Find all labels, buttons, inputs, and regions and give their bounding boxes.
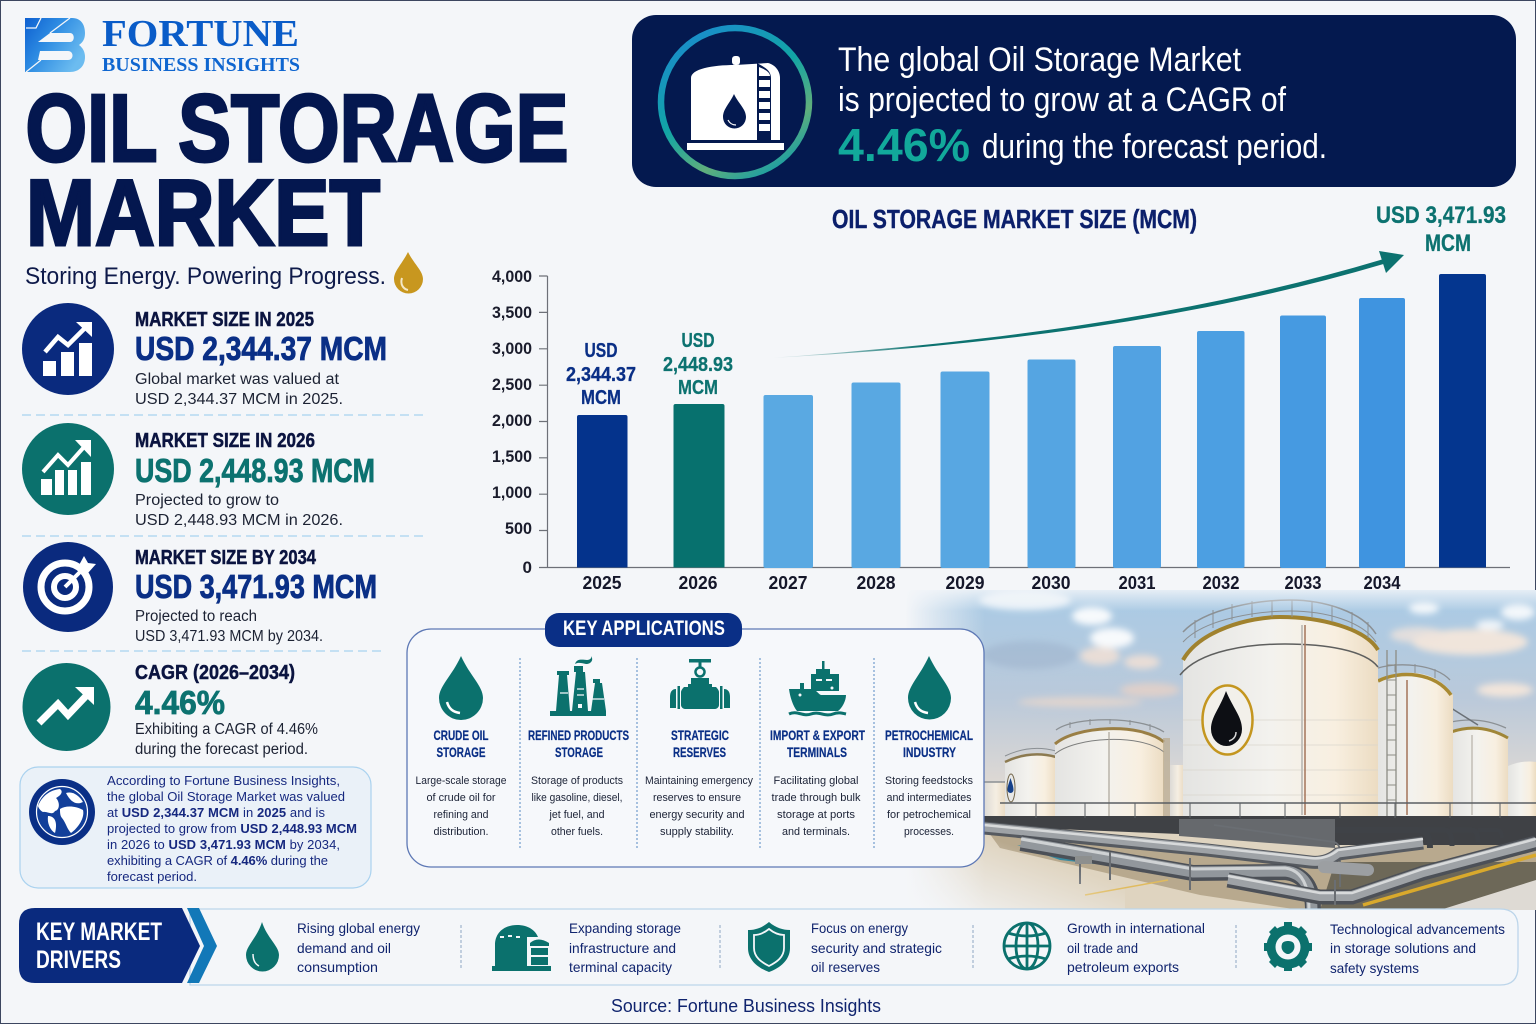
chart title: OIL STORAGE MARKET SIZE (MCM) xyxy=(832,204,1197,234)
driver: energy demand xyxy=(246,920,420,975)
small background tanks xyxy=(984,748,1536,818)
icon: drop xyxy=(439,656,483,720)
icon: FB monogram xyxy=(25,18,85,72)
driver heading: DRIVERS xyxy=(36,946,121,974)
application: crude oil storage: STORAGE xyxy=(436,745,486,760)
application: strategic reserves: RESERVES xyxy=(673,745,726,760)
panel: summary note: forecast period. xyxy=(107,869,197,884)
callout: 2034 value xyxy=(1376,202,1506,257)
heading pill: KEY APPLICATIONS xyxy=(563,617,725,640)
driver: technology: Technological advancements xyxy=(1330,921,1505,937)
y axis: 500 xyxy=(505,519,532,538)
driver heading: KEY MARKET xyxy=(36,918,162,946)
application: crude oil storage: CRUDE OIL xyxy=(434,728,488,743)
application: import and export terminals: storage at ports xyxy=(777,809,856,821)
application: import and export terminals: and terminals. xyxy=(782,826,850,838)
bar label 2025: 2,344.37 xyxy=(566,364,636,386)
icon: globe xyxy=(29,779,95,845)
icon: refinery xyxy=(550,656,606,716)
icon: drop xyxy=(908,656,951,719)
stat card: CAGR: 4.46% xyxy=(135,684,225,721)
panel: summary note: According to Fortune Business Insights, xyxy=(107,773,340,788)
application: petrochemical industry: processes. xyxy=(904,826,954,838)
icon: valve xyxy=(670,659,730,709)
stat card: CAGR: Exhibiting a CAGR of 4.46% xyxy=(135,721,318,738)
application: strategic reserves: energy security and xyxy=(650,809,744,821)
stat card: market size 2034: MARKET SIZE BY 2034 xyxy=(135,547,317,569)
driver: technology: safety systems xyxy=(1330,960,1419,976)
year labels: 2027 xyxy=(768,573,808,593)
application: petrochemical industry: PETROCHEMICAL xyxy=(885,728,973,743)
icon: gold oil drop xyxy=(394,252,423,294)
tagline xyxy=(25,252,423,294)
driver: international trade: oil trade and xyxy=(1067,940,1138,956)
bar chart xyxy=(492,251,1510,593)
icon: growth chart teal xyxy=(22,423,114,515)
application: import and export terminals: TERMINALS xyxy=(787,745,847,760)
bar label 2025: MCM xyxy=(581,387,621,409)
driver: technology: in storage solutions and xyxy=(1330,940,1476,956)
driver heading xyxy=(19,908,217,983)
bars xyxy=(577,274,1486,568)
stat card: CAGR xyxy=(22,662,318,758)
left tank xyxy=(1055,719,1170,818)
application: import and export terminals xyxy=(770,661,866,838)
panel: key applications xyxy=(407,613,984,867)
logo: Fortune Business Insights xyxy=(25,13,300,76)
y axis: 3,000 xyxy=(492,339,532,358)
application: crude oil storage: distribution. xyxy=(434,826,488,838)
driver: international trade: Growth in international xyxy=(1067,920,1205,936)
banner: CAGR headline: is projected to grow at a CAGR of xyxy=(838,81,1286,119)
driver: storage infrastructure: Expanding storage xyxy=(569,920,681,936)
application: import and export terminals: IMPORT & EXPORT xyxy=(770,728,866,743)
stat card: CAGR: during the forecast period. xyxy=(135,741,308,758)
application: refined products storage: jet fuel, and xyxy=(549,809,604,821)
driver: technology xyxy=(1264,921,1505,976)
arrow: growth trend xyxy=(770,251,1404,358)
bar label 2025: USD xyxy=(584,340,618,362)
bar label 2025 xyxy=(566,340,636,409)
year labels: 2034 xyxy=(1364,573,1400,593)
driver: energy security: oil reserves xyxy=(811,959,880,975)
title xyxy=(26,75,568,265)
stat card: market size 2034: USD 3,471.93 MCM xyxy=(135,568,377,605)
driver: storage infrastructure xyxy=(492,920,681,975)
stat card: market size 2025 xyxy=(22,303,387,408)
driver: energy demand: Rising global energy xyxy=(297,920,420,936)
application: strategic reserves: reserves to ensure xyxy=(653,792,741,804)
year labels: 2026 xyxy=(678,573,718,593)
driver: international trade: petroleum exports xyxy=(1067,959,1179,975)
year labels: 2033 xyxy=(1284,573,1322,593)
icon: storage tank in ring xyxy=(661,28,809,176)
year labels: 2025 xyxy=(582,573,622,593)
banner: CAGR headline: 4.46% xyxy=(838,119,970,171)
stat card: CAGR: CAGR (2026–2034) xyxy=(135,662,295,684)
application: strategic reserves: supply stability. xyxy=(660,826,734,838)
main tank xyxy=(1180,600,1378,818)
stat card: market size 2025: MARKET SIZE IN 2025 xyxy=(135,309,314,331)
driver: energy security: Focus on energy xyxy=(811,920,908,936)
callout: 2034 value: USD 3,471.93 xyxy=(1376,202,1506,229)
application: refined products storage: like gasoline, diesel, xyxy=(532,792,622,804)
bar label 2026 xyxy=(663,330,733,399)
stat card: market size 2025: USD 2,344.37 MCM xyxy=(135,330,387,367)
pipes xyxy=(984,825,1536,910)
bar label 2026: 2,448.93 xyxy=(663,354,733,376)
application: strategic reserves: Maintaining emergency xyxy=(645,775,753,787)
application: crude oil storage xyxy=(416,656,506,838)
driver: energy demand: consumption xyxy=(297,959,378,975)
icon: growth chart navy xyxy=(22,303,114,395)
y axis: 0 xyxy=(523,558,532,577)
right tanks xyxy=(1377,650,1508,820)
icon: target with arrow xyxy=(23,542,113,632)
callout: 2034 value: MCM xyxy=(1425,230,1471,257)
stat card: market size 2026: Projected to grow to xyxy=(135,492,279,509)
bar label 2026: USD xyxy=(682,330,714,352)
y axis: 1,500 xyxy=(492,447,532,466)
y axis: 1,000 xyxy=(492,483,532,502)
bar label 2026: MCM xyxy=(678,377,718,399)
panel: summary note: in 2026 to USD 3,471.93 MCM by 2034, xyxy=(107,837,340,852)
panel: summary note xyxy=(20,767,371,888)
stat card: market size 2034: USD 3,471.93 MCM by 2034. xyxy=(135,628,323,645)
application: crude oil storage: Large-scale storage xyxy=(416,775,506,787)
clouds xyxy=(979,590,1535,707)
year labels: 2028 xyxy=(856,573,896,593)
title: OIL STORAGE xyxy=(26,75,568,182)
application: strategic reserves xyxy=(645,659,753,838)
stat card: market size 2026: USD 2,448.93 MCM in 2026. xyxy=(135,512,343,529)
stat card: market size 2026: MARKET SIZE IN 2026 xyxy=(135,430,315,452)
y axis: 4,000 xyxy=(492,267,532,286)
application: import and export terminals: trade through bulk xyxy=(772,792,861,804)
application: petrochemical industry: INDUSTRY xyxy=(903,745,956,760)
y axis: 2,500 xyxy=(492,375,532,394)
stat card: market size 2034: Projected to reach xyxy=(135,608,257,625)
y axis: 3,500 xyxy=(492,303,532,322)
heading pill xyxy=(545,613,742,647)
source: Source: Fortune Business Insights xyxy=(611,996,881,1016)
logo: Fortune Business Insights: FORTUNE xyxy=(102,13,299,55)
year labels: 2032 xyxy=(1202,573,1240,593)
application: crude oil storage: of crude oil for xyxy=(426,792,496,804)
driver: storage infrastructure: terminal capacity xyxy=(569,959,672,975)
application: petrochemical industry xyxy=(885,656,973,838)
driver: storage infrastructure: infrastructure and xyxy=(569,940,676,956)
application: strategic reserves: STRATEGIC xyxy=(671,728,729,743)
stat card: market size 2034 xyxy=(23,542,377,645)
panel: key market drivers xyxy=(19,908,1518,985)
panel: summary note: at USD 2,344.37 MCM in 2025 and is xyxy=(107,805,326,820)
application: refined products storage: other fuels. xyxy=(551,826,603,838)
stat card: market size 2026 xyxy=(22,423,375,529)
stat card: market size 2026: USD 2,448.93 MCM xyxy=(135,452,375,489)
tagline: Storing Energy. Powering Progress. xyxy=(25,263,386,290)
y axis: 2,000 xyxy=(492,411,532,430)
panel: summary note: exhibiting a CAGR of 4.46% during the xyxy=(107,853,328,868)
photo: oil storage tanks xyxy=(905,585,1536,910)
year labels: 2029 xyxy=(946,573,984,593)
banner: CAGR headline: during the forecast period. xyxy=(982,128,1327,166)
application: refined products storage xyxy=(528,656,629,838)
driver: international trade xyxy=(1004,920,1205,975)
application: petrochemical industry: and intermediates xyxy=(886,792,972,804)
driver: energy security xyxy=(748,920,942,975)
application: petrochemical industry: Storing feedstocks xyxy=(885,775,973,787)
stat card: market size 2025: USD 2,344.37 MCM in 2025. xyxy=(135,391,343,408)
banner: CAGR headline xyxy=(632,15,1516,187)
banner: CAGR headline: The global Oil Storage Market xyxy=(838,41,1241,79)
application: refined products storage: Storage of products xyxy=(531,775,623,787)
year labels: 2031 xyxy=(1118,573,1156,593)
application: crude oil storage: refining and xyxy=(434,809,488,821)
year labels xyxy=(582,573,1400,593)
icon: rising arrow xyxy=(22,663,110,751)
application: refined products storage: REFINED PRODUCTS xyxy=(528,728,629,743)
y axis xyxy=(492,267,1510,577)
icon: ship xyxy=(789,661,846,715)
application: import and export terminals: Facilitating global xyxy=(774,775,858,787)
application: petrochemical industry: for petrochemical xyxy=(887,809,971,821)
year labels: 2030 xyxy=(1032,573,1070,593)
driver: energy security: security and strategic xyxy=(811,940,942,956)
driver: energy demand: demand and oil xyxy=(297,940,391,956)
application: refined products storage: STORAGE xyxy=(555,745,603,760)
title: MARKET xyxy=(26,160,380,265)
panel: summary note: the global Oil Storage Market was valued xyxy=(107,789,345,804)
deck and ground xyxy=(905,803,1536,910)
edge fades xyxy=(905,585,1536,910)
panel: summary note: projected to grow from USD 2,448.93 MCM xyxy=(107,821,357,836)
stat card: market size 2025: Global market was valued at xyxy=(135,371,340,388)
logo: Fortune Business Insights: BUSINESS INSIGHTS xyxy=(102,54,300,76)
